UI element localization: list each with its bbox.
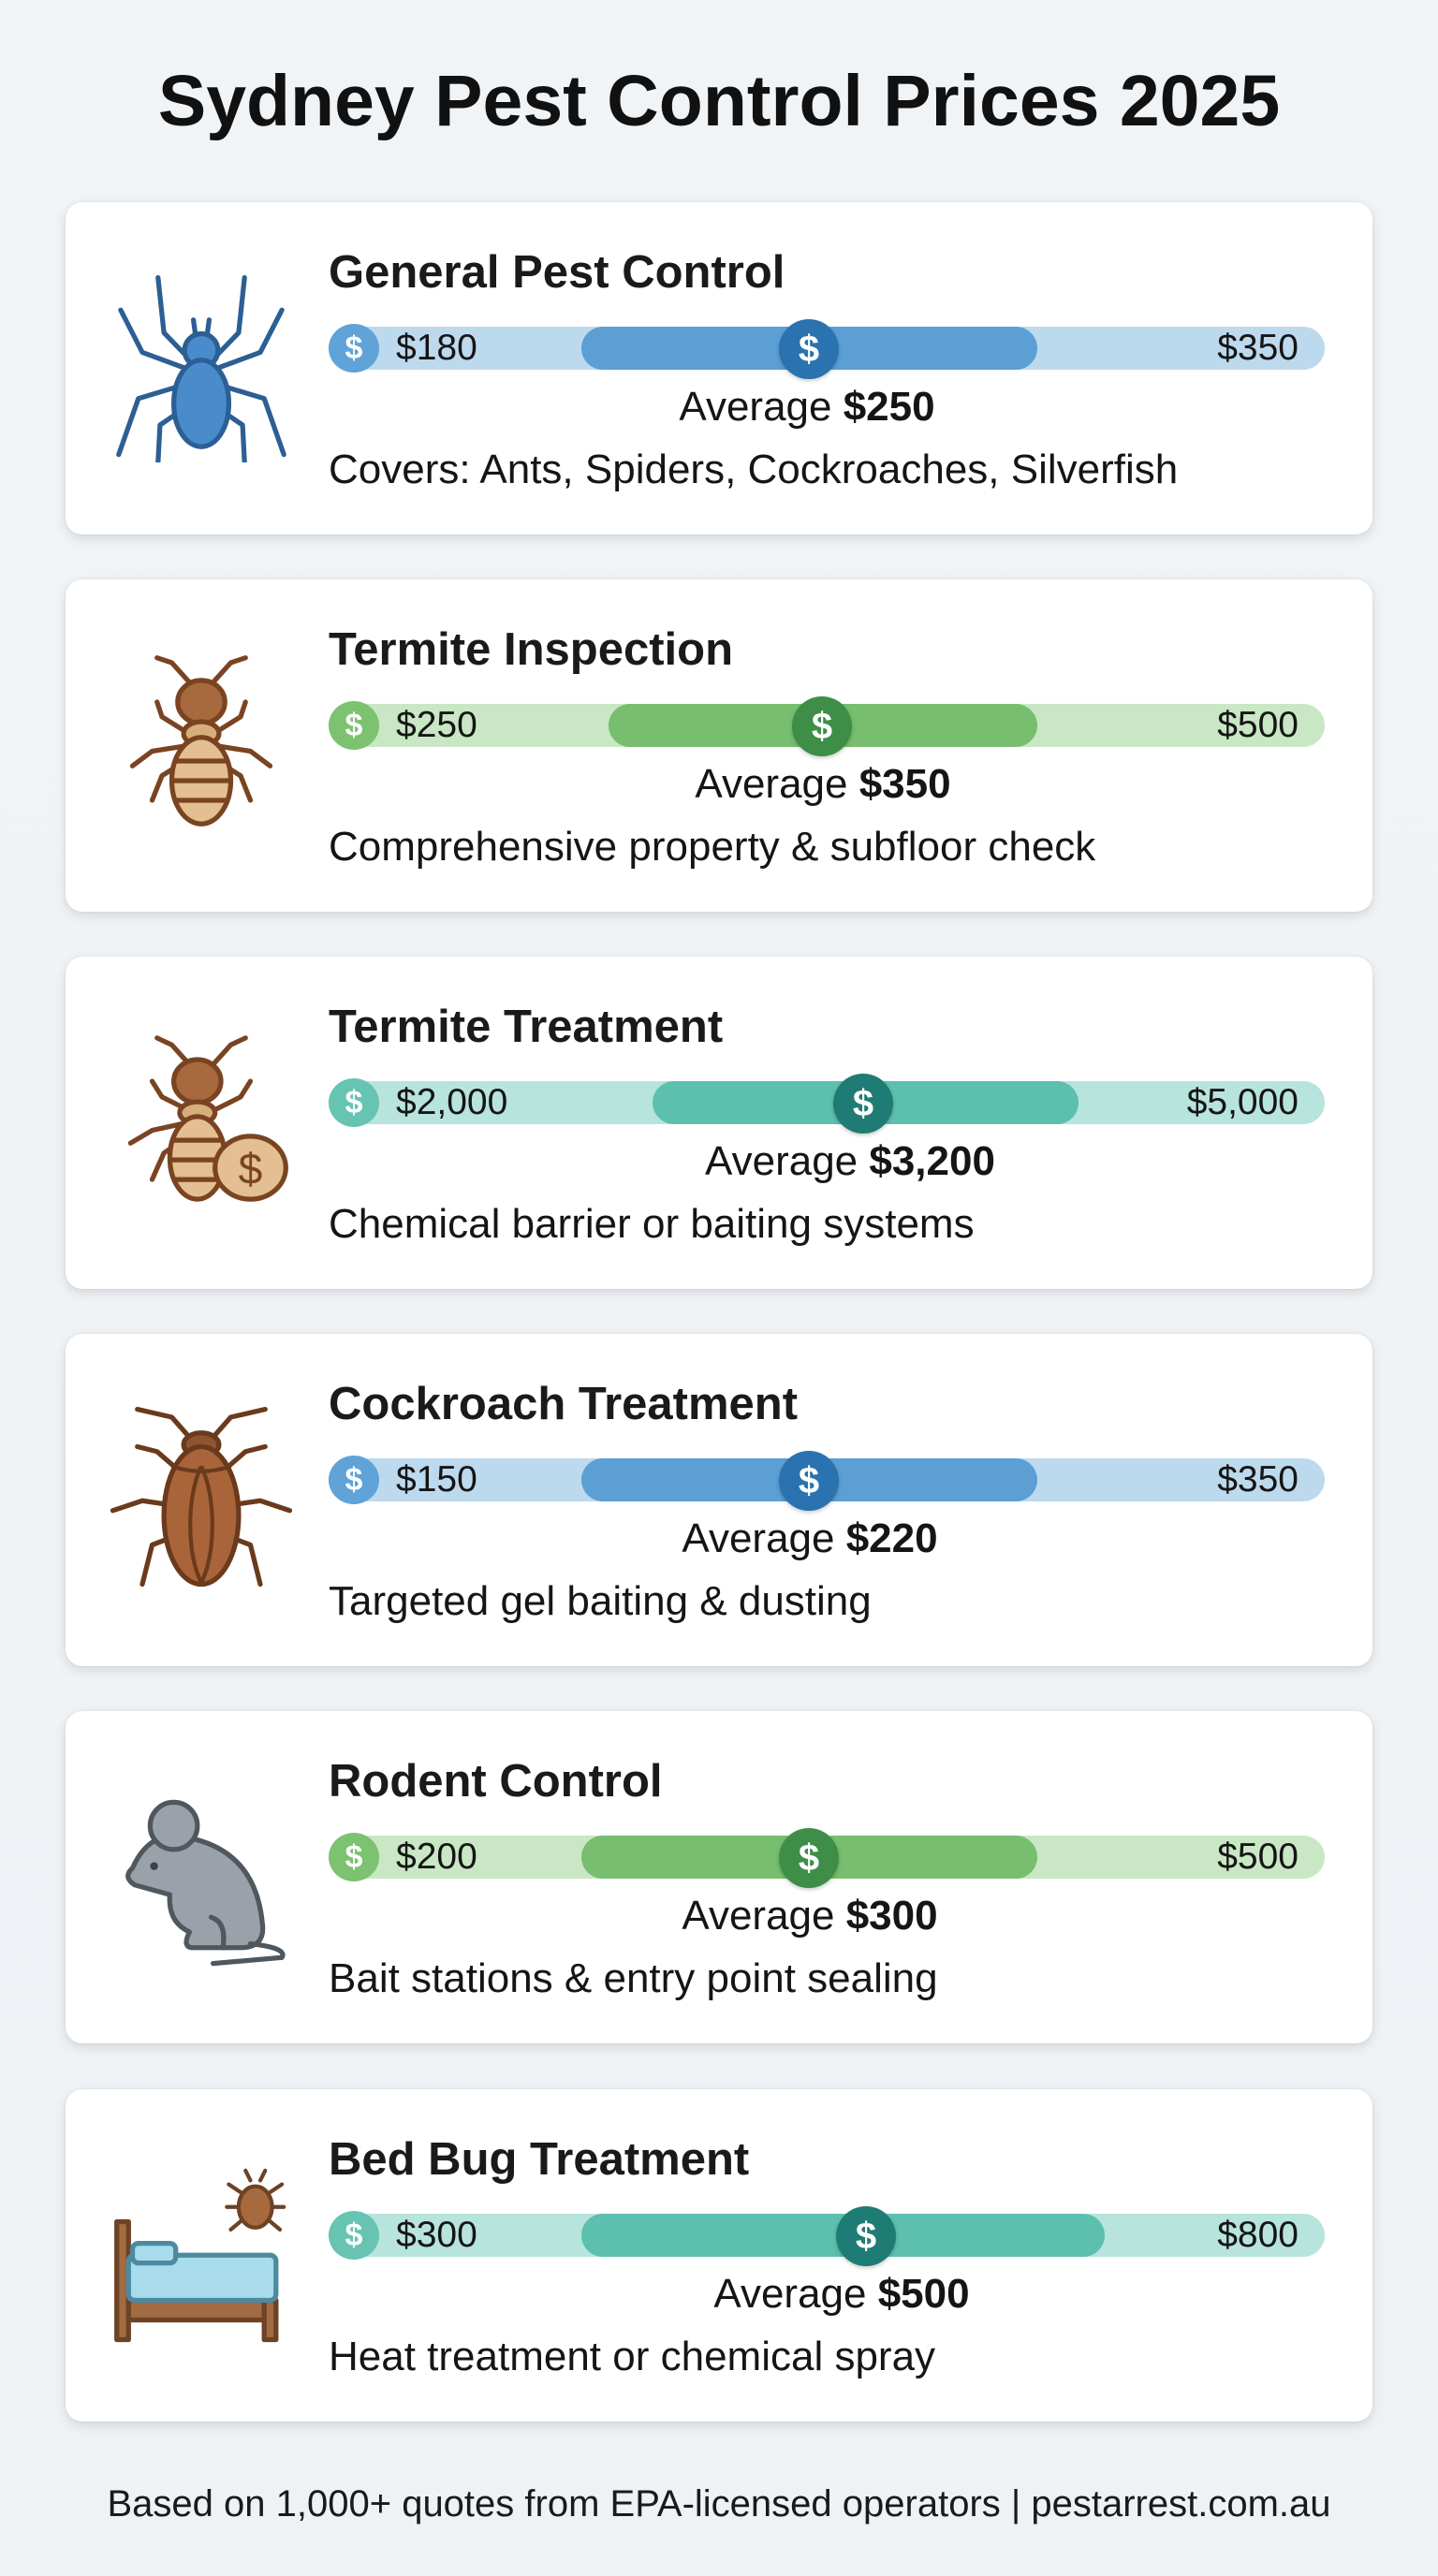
price range bar: $2,000 [396, 1082, 507, 1122]
description: Bait stations & entry point sealing [329, 1955, 938, 2001]
average: Average $300 [682, 1893, 938, 1939]
average: Average $350 [695, 761, 951, 807]
heading: Rodent Control [329, 1756, 663, 1807]
price range bar: $ [812, 706, 832, 747]
price range bar: $350 [1217, 328, 1299, 368]
price range bar: $ [856, 2216, 876, 2257]
description: Comprehensive property & subfloor check [329, 824, 1095, 870]
price range bar [329, 1458, 1325, 1501]
price range bar: $200 [396, 1837, 477, 1877]
price range bar [329, 1081, 1325, 1124]
panel: termite inspection [66, 579, 1372, 912]
heading: Bed Bug Treatment [329, 2134, 749, 2185]
panel: cockroach treatment [66, 1334, 1372, 1666]
description: Heat treatment or chemical spray [329, 2334, 935, 2379]
price range bar: $ [345, 330, 362, 366]
price range bar [329, 327, 1325, 370]
price range bar: $ [799, 1460, 819, 1501]
price range bar: $ [853, 1083, 873, 1124]
price range bar: $ [345, 1462, 362, 1498]
average: Average $250 [679, 384, 935, 430]
price range bar: $500 [1217, 705, 1299, 745]
footer: Based on 1,000+ quotes from EPA-licensed operators | pestarrest.com.au [107, 2483, 1331, 2525]
price range bar: $350 [1217, 1459, 1299, 1500]
panel: rodent control [66, 1711, 1372, 2043]
icon: mouse [125, 1799, 286, 1966]
price range bar: $ [345, 1839, 362, 1875]
heading: Cockroach Treatment [329, 1379, 798, 1429]
price range bar [329, 1836, 1325, 1879]
price range bar: $800 [1217, 2215, 1299, 2255]
price range bar: $250 [396, 705, 477, 745]
price range bar: $ [799, 329, 819, 370]
price range bar [329, 2214, 1325, 2257]
heading: General Pest Control [329, 247, 785, 298]
title: Sydney Pest Control Prices 2025 [158, 61, 1280, 141]
icon: bed with bug [114, 2168, 286, 2342]
price range bar: $ [799, 1837, 819, 1879]
icon: termite [129, 655, 273, 827]
icon: spider [116, 275, 286, 462]
icon: termite with coin: $ [239, 1144, 262, 1193]
price range bar: $ [345, 1085, 362, 1120]
heading: Termite Inspection [329, 624, 733, 675]
icon: cockroach [110, 1407, 292, 1588]
panel: termite treatment [66, 957, 1372, 1289]
price range bar [329, 704, 1325, 747]
price range bar: $ [345, 708, 362, 743]
average: Average $3,200 [705, 1138, 995, 1184]
price range bar: $ [345, 2217, 362, 2253]
price range bar: $500 [1217, 1837, 1299, 1877]
price range bar: $5,000 [1187, 1082, 1299, 1122]
price range bar: $300 [396, 2215, 477, 2255]
price range bar: $150 [396, 1459, 477, 1500]
price range bar: $180 [396, 328, 477, 368]
panel: bed bug treatment [66, 2089, 1372, 2422]
description: Covers: Ants, Spiders, Cockroaches, Silverfish [329, 446, 1178, 492]
heading: Termite Treatment [329, 1002, 723, 1052]
description: Chemical barrier or baiting systems [329, 1201, 975, 1247]
panel: general pest control [66, 202, 1372, 534]
average: Average $220 [682, 1515, 938, 1561]
description: Targeted gel baiting & dusting [329, 1578, 872, 1624]
icon: termite with coin [127, 1035, 288, 1202]
average: Average $500 [713, 2271, 970, 2317]
